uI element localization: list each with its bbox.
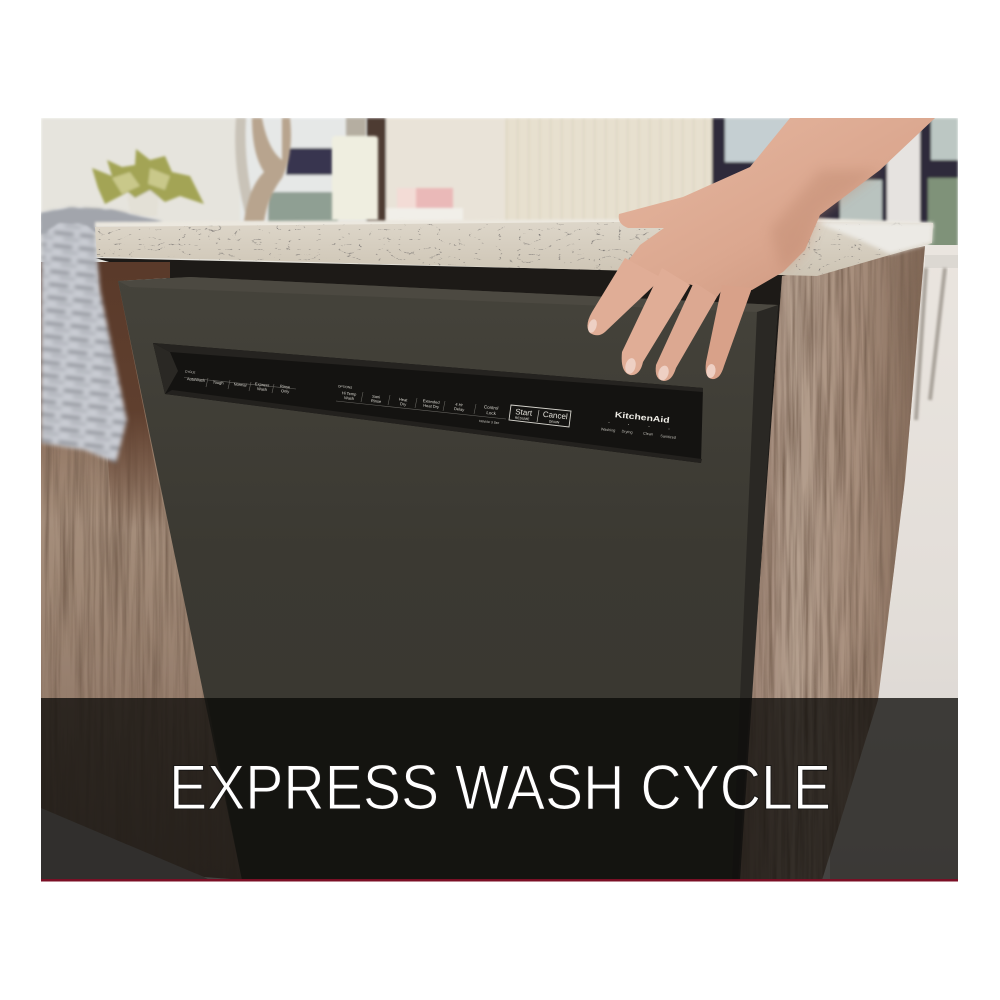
- cycle button labels: Only: [281, 388, 289, 394]
- option button labels: 4 Hr: [455, 402, 464, 407]
- ring finger: [656, 282, 717, 381]
- option button labels: Control: [484, 404, 499, 411]
- status indicators: [601, 422, 676, 440]
- panel recess top shadow: [153, 343, 703, 392]
- start and cancel buttons: DRAIN: [549, 419, 560, 425]
- cycle button labels: Wash: [257, 386, 267, 392]
- cycle button labels: AutoWash: [187, 376, 205, 383]
- pinky finger: [706, 285, 752, 379]
- icon: potted plant: [90, 148, 205, 206]
- status indicators: Clean: [643, 431, 653, 437]
- left cabinet inner trim: [97, 262, 170, 530]
- background: kitchen wall and windows: [41, 118, 958, 288]
- cycle button labels: Express: [255, 381, 270, 388]
- photo: kitchen scene: [41, 118, 958, 880]
- option button labels: Dry: [400, 401, 407, 407]
- cycle button labels: [185, 370, 291, 394]
- option button labels: Hold for 3 Sec: [479, 419, 500, 425]
- infographic: dishwasher photo with caption: [41, 118, 958, 882]
- status indicators: Sanitized: [660, 434, 676, 440]
- left cabinet wood panel: [41, 262, 245, 880]
- faucet: [235, 118, 291, 222]
- option button labels: Rinse: [371, 398, 382, 404]
- door shadow inside banner: [207, 698, 750, 880]
- status indicators: Washing: [601, 427, 616, 433]
- option button labels: Sani: [372, 394, 381, 399]
- KitchenAid logo: KitchenAid: [614, 410, 670, 425]
- towel: [41, 208, 163, 463]
- soap dispenser: [332, 118, 378, 220]
- option button labels: Wash: [344, 395, 354, 401]
- option button labels: Hi Temp: [342, 390, 357, 397]
- options underline and dividers: [336, 392, 506, 419]
- caption banner: [41, 698, 958, 880]
- right cabinet wood panel: [738, 246, 925, 880]
- option button labels: Heat: [399, 397, 409, 403]
- option button labels: Heat Dry: [423, 403, 439, 409]
- start and cancel buttons: RESUME: [515, 416, 530, 421]
- dark recess beneath the counter: [96, 258, 786, 625]
- option button labels: OPTIONS: [338, 384, 352, 390]
- right side: floor and stool: [830, 245, 958, 880]
- middle finger: [622, 268, 690, 375]
- option button labels: [338, 384, 500, 425]
- fingernails: [587, 318, 716, 382]
- door right edge: [738, 305, 778, 879]
- arm and palm: [619, 118, 935, 297]
- dishwasher door: [118, 277, 778, 880]
- status indicators: Drying: [621, 429, 633, 435]
- left floor: [41, 808, 208, 879]
- hand and forearm: [587, 118, 935, 382]
- cycle underline and dividers: [184, 378, 296, 393]
- cycle button labels: CYCLE: [185, 370, 196, 375]
- cycle button labels: Tough: [212, 379, 224, 386]
- control panel: [153, 343, 703, 463]
- title: express wash cycle: EXPRESS WASH CYCLE: [169, 753, 831, 823]
- countertop: [95, 218, 933, 276]
- cycle button labels: Rinse: [280, 384, 291, 390]
- cycle button labels: Normal: [233, 381, 247, 388]
- option button labels: Delay: [454, 406, 465, 412]
- wrist shading: [770, 170, 880, 272]
- soap dish: [387, 188, 463, 222]
- start and cancel buttons: Cancel: [542, 410, 568, 421]
- option button labels: Lock: [486, 410, 497, 416]
- start and cancel buttons: [509, 405, 571, 427]
- start and cancel buttons: Start: [515, 407, 533, 418]
- door top lip: [118, 277, 778, 312]
- index finger: [587, 258, 662, 335]
- option button labels: Extended: [422, 398, 440, 405]
- red bottom rule: [41, 879, 958, 882]
